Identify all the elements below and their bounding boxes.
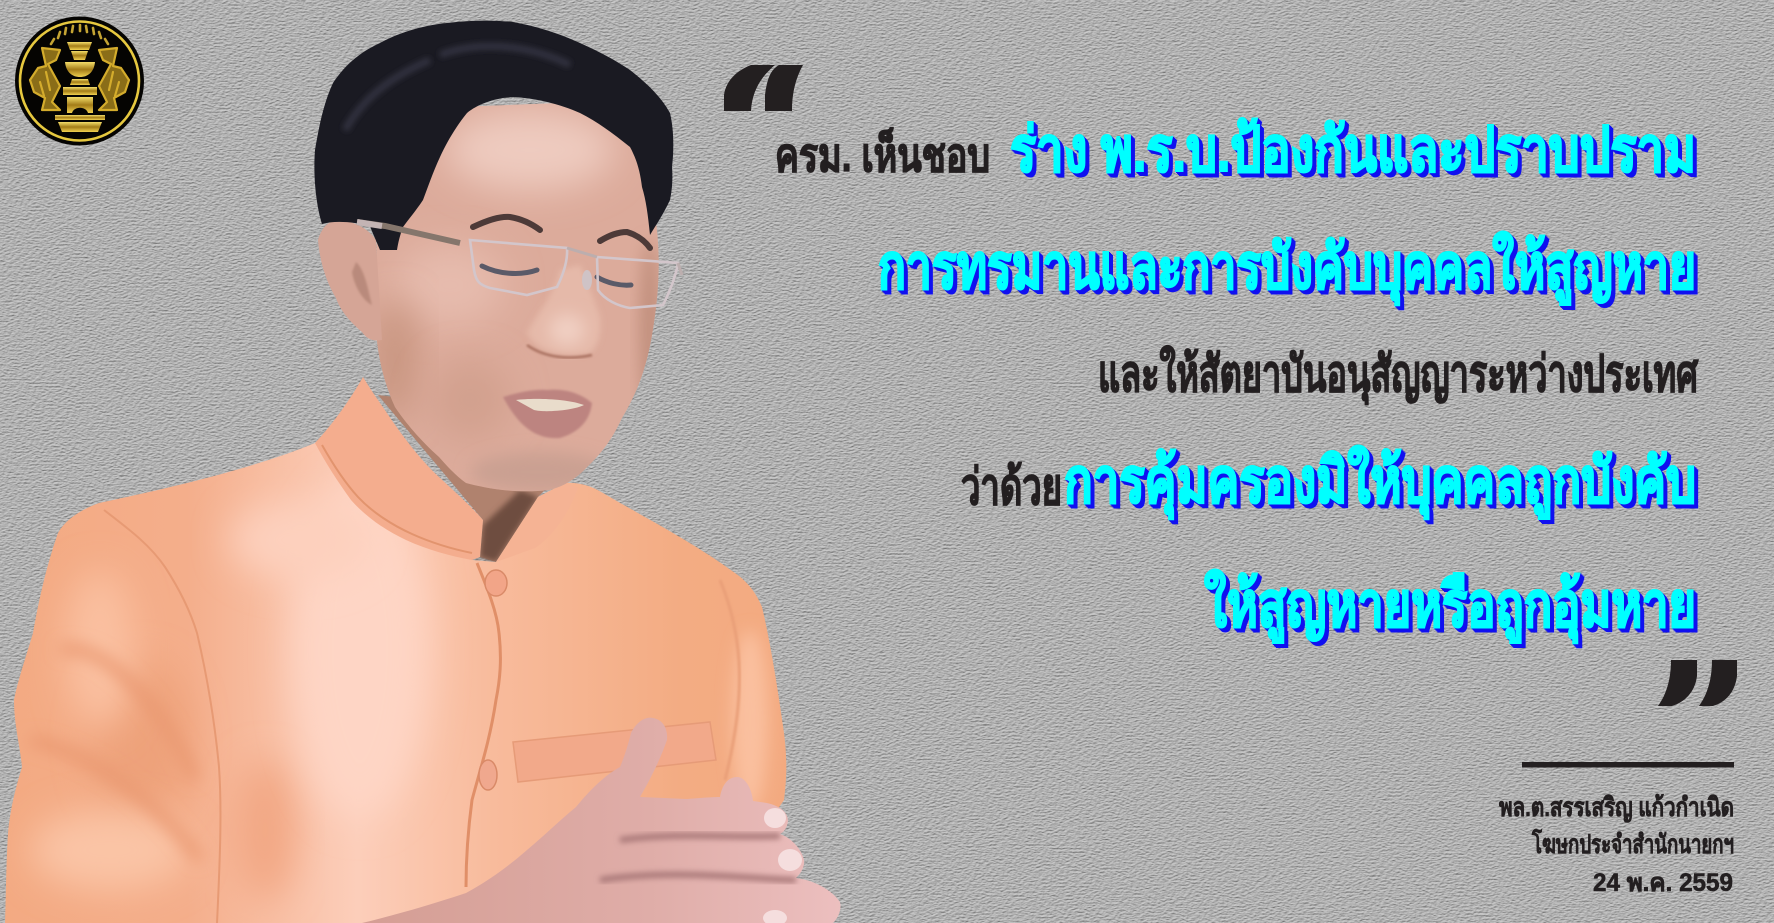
button upper [485,570,507,596]
seal: urn [55,42,105,132]
nose [527,265,601,354]
sleeve folds [30,649,200,860]
divider rule above attribution [1522,762,1734,768]
chest pocket [513,722,716,782]
quote text [775,116,1699,643]
eyebrows [473,217,650,248]
seal: left lion [30,48,60,110]
date: 24 พ.ค. 2559 [1593,869,1733,897]
shirt body [5,443,786,923]
right collar edge [496,483,578,562]
attribution [1499,792,1734,897]
ear [318,220,382,341]
icon: government seal [15,16,144,146]
placket line [466,563,500,887]
seal: right lion [99,48,129,110]
hair [314,21,673,250]
collar [315,377,483,560]
hand [362,718,840,923]
icon: closing quote mark [1658,660,1737,706]
icon: opening quote mark [724,65,803,111]
line 4 dark lead: ว่าด้วย [961,459,1062,515]
line 1 dark lead: ครม. เห็นชอบ [775,127,990,181]
seal: flame arc [51,25,108,44]
eyes [482,266,631,285]
photo: speaker portrait [0,21,850,923]
glasses [357,222,682,308]
neck [378,395,565,562]
mouth [503,390,592,438]
button lower [479,760,497,790]
fingernails [764,808,786,828]
sleeve seam [104,510,220,923]
face [376,103,659,492]
